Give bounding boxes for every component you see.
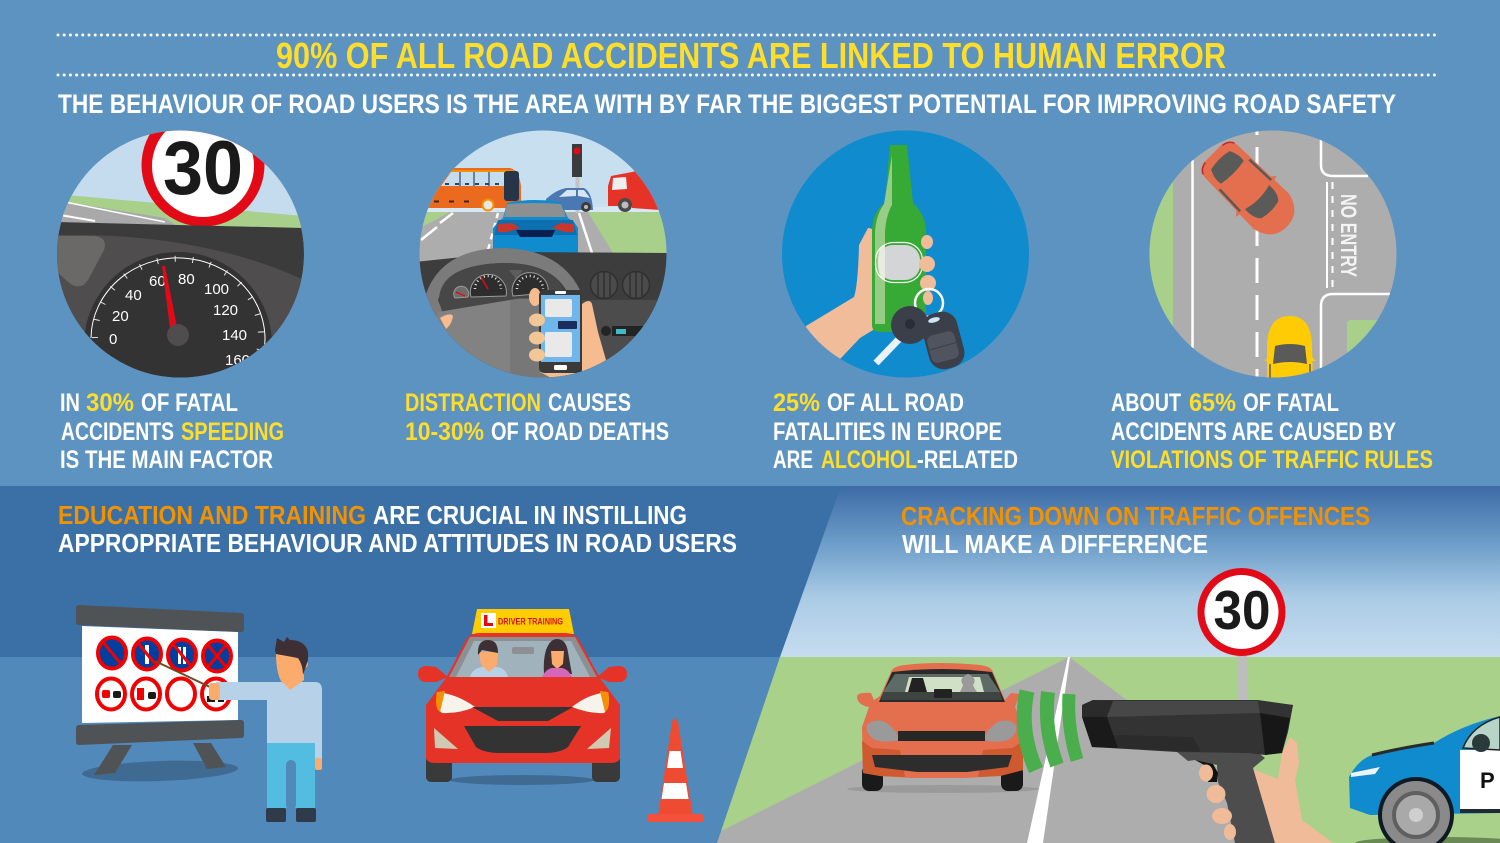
icon: beer bottle and car keys circle	[780, 130, 1032, 380]
hand	[806, 228, 874, 359]
speed limit sign: 30	[1214, 579, 1270, 641]
stat: speeding: SPEEDING	[181, 418, 284, 446]
road sign board	[76, 605, 244, 784]
icon: speedometer circle with 30 sign	[57, 130, 304, 378]
stat: speeding	[60, 389, 284, 474]
header: dotted rule top	[58, 34, 1437, 36]
education heading	[58, 500, 737, 558]
icon: speedometer circle with 30 sign: 40	[125, 287, 142, 304]
stat: distraction: CAUSES	[548, 389, 631, 417]
stat: traffic rule violations: VIOLATIONS OF TRAFFIC RULES	[1111, 446, 1433, 474]
stat: alcohol: 25%	[773, 389, 820, 417]
title: 90% OF ALL ROAD ACCIDENTS ARE LINKED TO HUMAN ERROR	[276, 35, 1226, 76]
keys	[876, 289, 968, 373]
right panel heading: CRACKING DOWN ON TRAFFIC OFFENCES	[901, 501, 1370, 531]
red truck	[608, 170, 660, 212]
stat: speeding: IS THE MAIN FACTOR	[60, 446, 273, 474]
stat: alcohol	[773, 389, 1018, 474]
stat: traffic rule violations	[1111, 389, 1433, 474]
yellow car	[1265, 316, 1316, 378]
police car: P	[1480, 768, 1495, 793]
education heading: APPROPRIATE BEHAVIOUR AND ATTITUDES IN ROAD USERS	[58, 528, 737, 558]
icon: traffic violation road circle	[1148, 130, 1400, 385]
traffic cone	[648, 718, 703, 822]
icon: phone distraction circle	[415, 130, 670, 380]
stat: traffic rule violations: 65%	[1189, 389, 1236, 417]
headlights	[437, 692, 475, 713]
stat: speeding: IN	[60, 389, 80, 417]
roof sign	[472, 609, 574, 634]
driving instructor	[470, 667, 508, 677]
bus	[425, 168, 521, 212]
icon: speedometer circle with 30 sign: 120	[213, 302, 238, 319]
hand holding speed gun	[1082, 700, 1333, 843]
stat: alcohol: ALCOHOL	[821, 446, 917, 474]
gauges	[454, 273, 548, 298]
roof sign: DRIVER TRAINING	[498, 616, 563, 628]
stat: traffic rule violations: ACCIDENTS ARE CAUSED BY	[1111, 418, 1396, 446]
hand with smartphone	[529, 288, 606, 380]
stat: alcohol: -RELATED	[917, 446, 1018, 474]
bottle	[872, 145, 926, 332]
icon: speedometer circle with 30 sign: 140	[222, 327, 247, 344]
road marking text: NO ENTRY	[1336, 194, 1361, 277]
icon: speedometer circle with 30 sign: 60	[149, 273, 166, 290]
stat: distraction: 10-30%	[405, 418, 484, 446]
speed limit sign	[1198, 568, 1286, 702]
instructor figure	[155, 637, 322, 822]
stat: distraction: DISTRACTION	[405, 389, 541, 417]
police car	[1349, 716, 1500, 843]
speed gun beam	[1024, 691, 1077, 770]
right panel heading	[901, 501, 1370, 559]
dashboard	[415, 252, 670, 380]
icon: speedometer circle with 30 sign: 160	[225, 352, 250, 369]
education heading: ARE CRUCIAL IN INSTILLING	[373, 500, 687, 530]
panel: education and training (left)	[0, 486, 841, 843]
stat: alcohol: ARE	[773, 446, 813, 474]
icon: speedometer circle with 30 sign: 0	[109, 331, 117, 348]
learner driver	[544, 639, 572, 674]
icon: speedometer circle with 30 sign: 80	[178, 271, 195, 288]
small blue car	[546, 188, 593, 212]
stat: distraction: OF ROAD DEATHS	[491, 418, 669, 446]
panel: cracking down (right)	[697, 486, 1500, 843]
stat: distraction	[405, 389, 669, 446]
icon: speedometer circle with 30 sign: 100	[204, 281, 229, 298]
traffic light	[572, 144, 582, 213]
education heading: EDUCATION AND TRAINING	[58, 500, 366, 530]
driver left hand	[440, 314, 453, 329]
stat: traffic rule violations: ABOUT	[1111, 389, 1181, 417]
orange car	[1202, 142, 1294, 234]
steering wheel	[426, 248, 580, 339]
blue car front	[493, 200, 578, 255]
fingers	[921, 235, 933, 249]
stat: alcohol: FATALITIES IN EUROPE	[773, 418, 1002, 446]
driver training car	[418, 609, 627, 785]
orange car	[847, 663, 1039, 793]
stat: speeding: OF FATAL	[141, 389, 238, 417]
stat: alcohol: OF ALL ROAD	[827, 389, 964, 417]
stat: speeding: 30%	[86, 389, 134, 417]
right panel heading: WILL MAKE A DIFFERENCE	[902, 529, 1208, 559]
stat: traffic rule violations: OF FATAL	[1243, 389, 1339, 417]
icon: speedometer circle with 30 sign: 30	[163, 126, 243, 211]
header: dotted rule bottom	[58, 74, 1437, 76]
icon: speedometer circle with 30 sign: 20	[112, 308, 129, 325]
stat: speeding: ACCIDENTS	[61, 418, 174, 446]
